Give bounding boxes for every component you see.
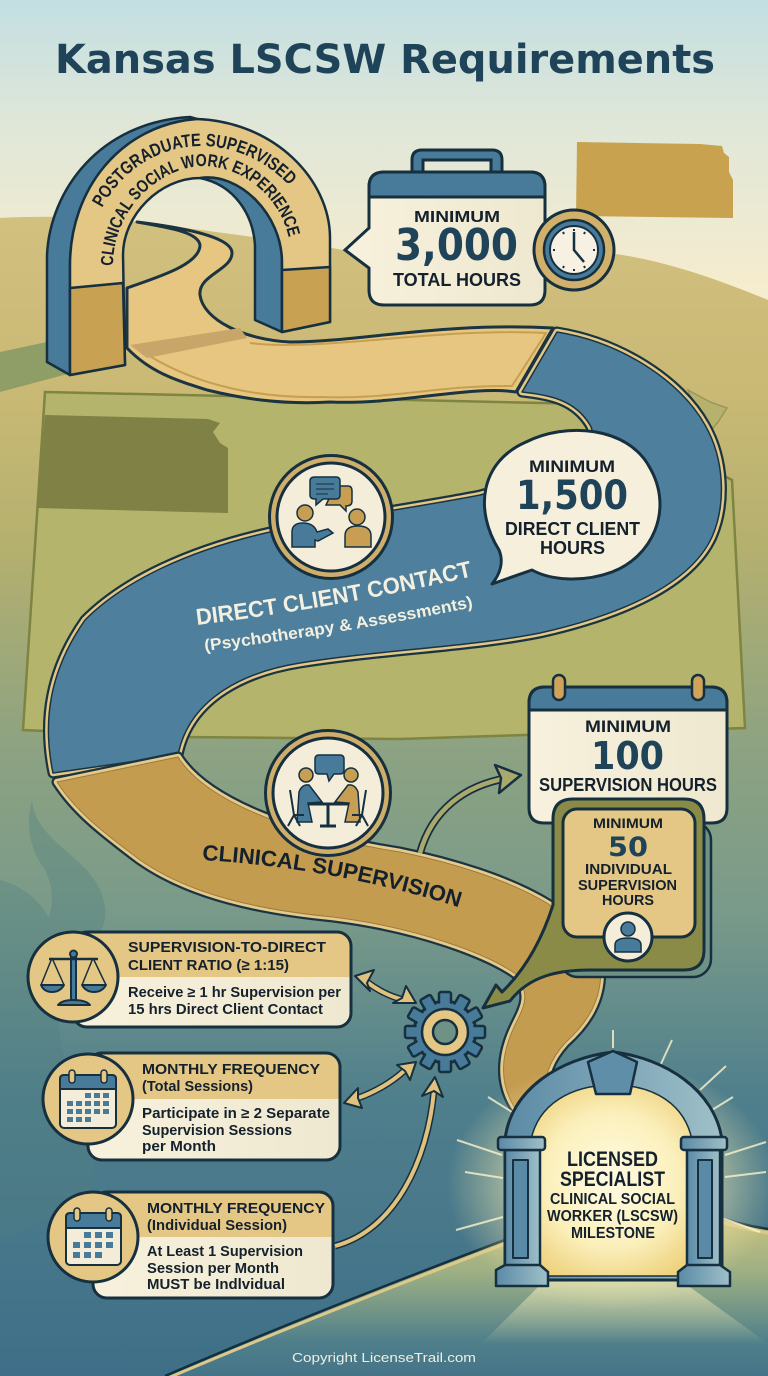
icon: clock <box>534 210 614 290</box>
panel: monthly frequency total sessions <box>43 1053 340 1160</box>
left pillar <box>496 1137 548 1286</box>
arch side inner <box>200 177 282 332</box>
right pillar <box>678 1137 730 1286</box>
speech bubble: 1,500 direct client hours: MINIMUM <box>529 457 615 476</box>
icon: balance scale <box>28 932 118 1022</box>
briefcase callout: 3,000 total hours: TOTAL HOURS <box>393 270 521 290</box>
ground edge <box>165 1218 768 1376</box>
arch text: POSTGRADUATE SUPERVISED <box>92 134 296 207</box>
calendar card: 100 supervision hours: SUPERVISION HOURS <box>539 775 717 795</box>
double arrow: total sessions <box>344 1062 416 1108</box>
arch side left <box>47 117 197 375</box>
large kansas map panel <box>23 392 745 739</box>
callout: 50 individual supervision hours <box>483 799 711 1008</box>
arrow: individual session <box>335 1077 443 1246</box>
callout: 50 individual supervision hours: 50 <box>608 832 648 863</box>
arch lower right block <box>282 267 330 332</box>
briefcase body <box>345 172 545 305</box>
title: Kansas LSCSW Requirements <box>55 37 715 83</box>
panel: monthly frequency total sessions: per Month <box>142 1139 216 1155</box>
panel: monthly frequency individual session: MUST be Indlvidual <box>147 1277 285 1293</box>
panel: monthly frequency individual session: Session per Month <box>147 1261 279 1277</box>
milestone label: LICENSED <box>567 1148 658 1171</box>
icon: person <box>604 913 652 961</box>
callout: 50 individual supervision hours: SUPERVISION <box>578 877 677 894</box>
road: postgraduate experience tan <box>127 222 553 403</box>
panel: supervision ratio <box>28 932 351 1027</box>
milestone label: WORKER (LSCSW) <box>547 1208 678 1225</box>
speech bubble: 1,500 direct client hours: DIRECT CLIENT <box>505 519 640 539</box>
heading: direct client contact: DIRECT CLIENT CONTACT <box>196 560 470 625</box>
icon: conversation <box>268 454 394 580</box>
briefcase callout: 3,000 total hours <box>345 150 545 305</box>
panel: supervision ratio: Receive ≥ 1 hr Supervision per <box>128 985 341 1001</box>
arrows to gear <box>335 970 443 1246</box>
calendar card: 100 supervision hours: MINIMUM <box>585 717 671 736</box>
calendar card: 100 supervision hours: 100 <box>591 734 664 778</box>
arch text: CLINICAL SOCIAL WORK EXPERIENCE <box>100 154 300 266</box>
light beam floor <box>480 1277 768 1345</box>
panel: monthly frequency individual session: (Individual Session) <box>147 1217 287 1234</box>
panel: supervision ratio: CLIENT RATIO (≥ 1:15) <box>128 957 289 974</box>
panel: monthly frequency total sessions: Supervision Sessions <box>142 1123 292 1139</box>
arch front face <box>70 119 330 375</box>
kansas outline bump right <box>688 390 727 428</box>
arch ground shadow <box>0 336 75 392</box>
heading: clinical supervision: CLINICAL SUPERVISION <box>203 845 462 907</box>
calendar card: 100 supervision hours <box>529 675 727 823</box>
panel: monthly frequency total sessions: Participate in ≥ 2 Separate <box>142 1106 330 1122</box>
road: direct client contact blue <box>42 326 727 778</box>
callout: 50 individual supervision hours: MINIMUM <box>593 815 663 831</box>
arch lower left block <box>70 283 125 375</box>
milestone label: SPECIALIST <box>560 1168 665 1191</box>
milestone label: CLINICAL SOCIAL <box>550 1191 675 1208</box>
panel: monthly frequency individual session <box>48 1192 333 1298</box>
briefcase callout: 3,000 total hours: MINIMUM <box>414 209 500 226</box>
panel: monthly frequency individual session: MONTHLY FREQUENCY <box>147 1200 325 1217</box>
road: clinical supervision gold <box>52 752 606 1112</box>
speech bubble: 1,500 direct client hours: HOURS <box>540 538 605 558</box>
icon: supervision meeting <box>264 729 392 857</box>
smoke shapes <box>0 800 105 1240</box>
background sky <box>0 0 768 360</box>
panel: monthly frequency total sessions: (Total Sessions) <box>142 1078 253 1095</box>
briefcase handle <box>412 150 502 178</box>
light rays <box>456 1030 766 1232</box>
milestone label: MILESTONE <box>571 1225 655 1242</box>
callout: 50 individual supervision hours: INDIVIDUAL <box>585 861 672 878</box>
subheading: psychotherapy and assessments: (Psychotherapy & Assessments) <box>205 596 472 654</box>
milestone label <box>547 1148 678 1242</box>
copyright: Copyright LicenseTrail.com <box>292 1350 476 1365</box>
milestone arch <box>496 1051 730 1286</box>
panel: supervision ratio: SUPERVISION-TO-DIRECT <box>128 939 326 956</box>
icon: calendar <box>43 1054 133 1144</box>
panel: monthly frequency total sessions: MONTHLY FREQUENCY <box>142 1061 320 1078</box>
callout: 50 individual supervision hours: HOURS <box>602 892 654 909</box>
bottom ground hill <box>165 1205 768 1376</box>
speech bubble: 1,500 direct client hours: 1,500 <box>516 473 628 519</box>
speech bubble: 1,500 direct client hours <box>484 430 660 584</box>
entry arch <box>46 116 332 376</box>
icon: gear <box>405 992 485 1072</box>
panel: monthly frequency individual session: At Least 1 Supervision <box>147 1244 303 1260</box>
icon: calendar <box>48 1192 138 1282</box>
kansas silhouette: left dark <box>37 415 228 513</box>
kansas silhouette: top right <box>576 142 733 218</box>
briefcase callout: 3,000 total hours: 3,000 <box>395 220 518 271</box>
panel: supervision ratio: 15 hrs Direct Client Contact <box>128 1002 323 1018</box>
double arrow: ratio <box>355 970 416 1003</box>
glow behind milestone arch <box>447 1060 768 1310</box>
keystone <box>588 1051 637 1094</box>
arrow: supervision to 100 hours <box>420 765 521 853</box>
